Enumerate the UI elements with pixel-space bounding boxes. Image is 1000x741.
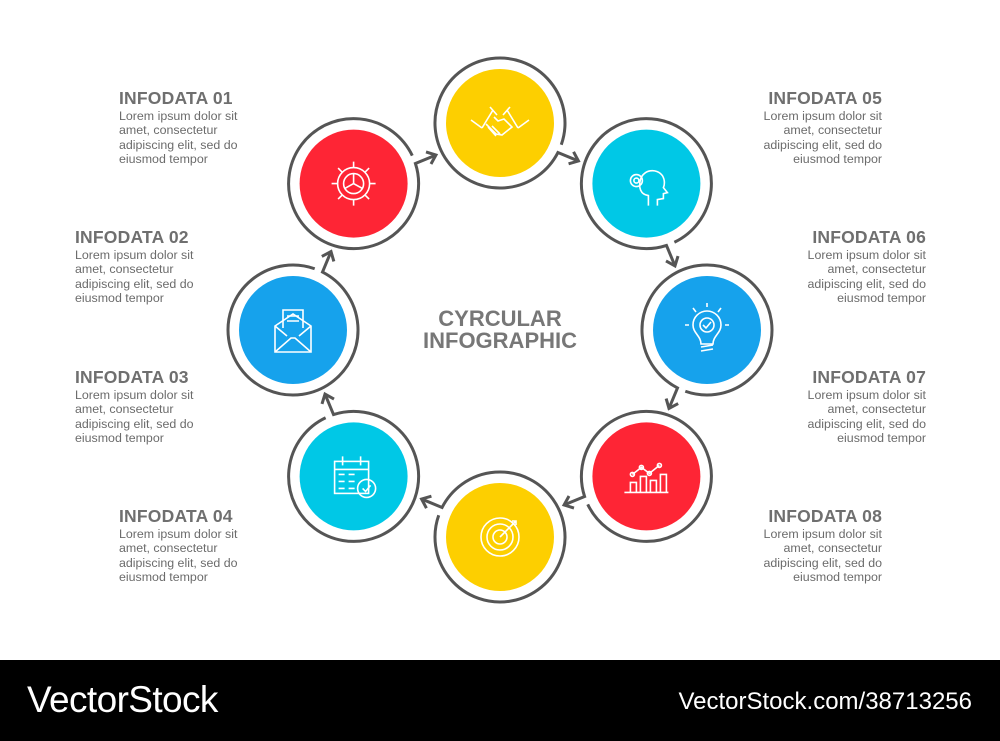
icon: mail	[275, 310, 311, 352]
text: infodata 06: Lorem ipsum dolor sit	[808, 248, 926, 262]
footer logo: VectorStock	[27, 679, 218, 720]
text: infodata 05	[764, 88, 882, 166]
text: infodata 03: INFODATA 03	[75, 367, 189, 387]
step 1 red	[269, 90, 459, 269]
text: infodata 01: INFODATA 01	[119, 88, 233, 108]
text: infodata 08: adipiscing elit, sed do	[764, 556, 882, 570]
icon: chart	[624, 463, 668, 492]
step 8 blue	[208, 225, 386, 415]
text: infodata 07	[808, 367, 926, 445]
text: infodata 06: INFODATA 06	[812, 227, 926, 247]
text: infodata 01: Lorem ipsum dolor sit	[119, 109, 237, 123]
text: infodata 05: adipiscing elit, sed do	[764, 138, 882, 152]
text: infodata 04: adipiscing elit, sed do	[119, 556, 237, 570]
text: infodata 02: amet, consectetur	[75, 262, 173, 276]
text: infodata 05: amet, consectetur	[784, 123, 882, 137]
step 4 blue	[614, 245, 792, 435]
text: infodata 05: eiusmod tempor	[793, 152, 882, 166]
text: infodata 03: Lorem ipsum dolor sit	[75, 388, 193, 402]
step 6 yellow	[395, 444, 585, 622]
text: infodata 01: eiusmod tempor	[119, 152, 208, 166]
text: infodata 03: eiusmod tempor	[75, 431, 164, 445]
text: infodata 02: adipiscing elit, sed do	[75, 277, 193, 291]
step 2 yellow	[415, 38, 605, 216]
text: infodata 04: eiusmod tempor	[119, 570, 208, 584]
diagram: INFOGRAPHIC	[423, 328, 577, 353]
text: infodata 04: INFODATA 04	[119, 506, 233, 526]
text: infodata 07: amet, consectetur	[828, 402, 926, 416]
text: infodata 01	[119, 88, 238, 166]
text: infodata 07: INFODATA 07	[812, 367, 926, 387]
text: infodata 02	[75, 227, 194, 305]
text: infodata 06: eiusmod tempor	[837, 291, 926, 305]
text: infodata 06: adipiscing elit, sed do	[808, 277, 926, 291]
text: infodata 03: amet, consectetur	[75, 402, 173, 416]
icon: gear	[332, 162, 376, 206]
step 3 cyan	[561, 99, 740, 289]
text: infodata 05: INFODATA 05	[768, 88, 882, 108]
text: infodata 05: Lorem ipsum dolor sit	[764, 109, 882, 123]
footer id: VectorStock.com/38713256	[678, 688, 972, 715]
text: infodata 02: eiusmod tempor	[75, 291, 164, 305]
text: infodata 08: INFODATA 08	[768, 506, 882, 526]
icon: head gear	[630, 171, 667, 206]
icon: handshake	[471, 107, 529, 136]
text: infodata 04	[119, 506, 238, 584]
text: infodata 07: adipiscing elit, sed do	[808, 417, 926, 431]
icon: bulb	[685, 303, 729, 351]
footer bar	[0, 660, 1000, 741]
step 7 cyan	[260, 371, 439, 561]
icon: calendar	[335, 456, 376, 497]
text: infodata 06	[808, 227, 926, 305]
text: infodata 02: Lorem ipsum dolor sit	[75, 248, 193, 262]
text: infodata 08: eiusmod tempor	[793, 570, 882, 584]
text: infodata 01: amet, consectetur	[119, 123, 217, 137]
text: infodata 03: adipiscing elit, sed do	[75, 417, 193, 431]
text: infodata 01: adipiscing elit, sed do	[119, 138, 237, 152]
step 5 red	[541, 391, 731, 570]
text: infodata 03	[75, 367, 194, 445]
icon: target	[481, 518, 519, 556]
text: infodata 06: amet, consectetur	[828, 262, 926, 276]
text: infodata 07: Lorem ipsum dolor sit	[808, 388, 926, 402]
title: CYRCULAR	[438, 306, 562, 331]
text: infodata 08: Lorem ipsum dolor sit	[764, 527, 882, 541]
text: infodata 04: amet, consectetur	[119, 541, 217, 555]
text: infodata 07: eiusmod tempor	[837, 431, 926, 445]
text: infodata 02: INFODATA 02	[75, 227, 189, 247]
text: infodata 08: amet, consectetur	[784, 541, 882, 555]
text: infodata 08	[764, 506, 882, 584]
text: infodata 04: Lorem ipsum dolor sit	[119, 527, 237, 541]
